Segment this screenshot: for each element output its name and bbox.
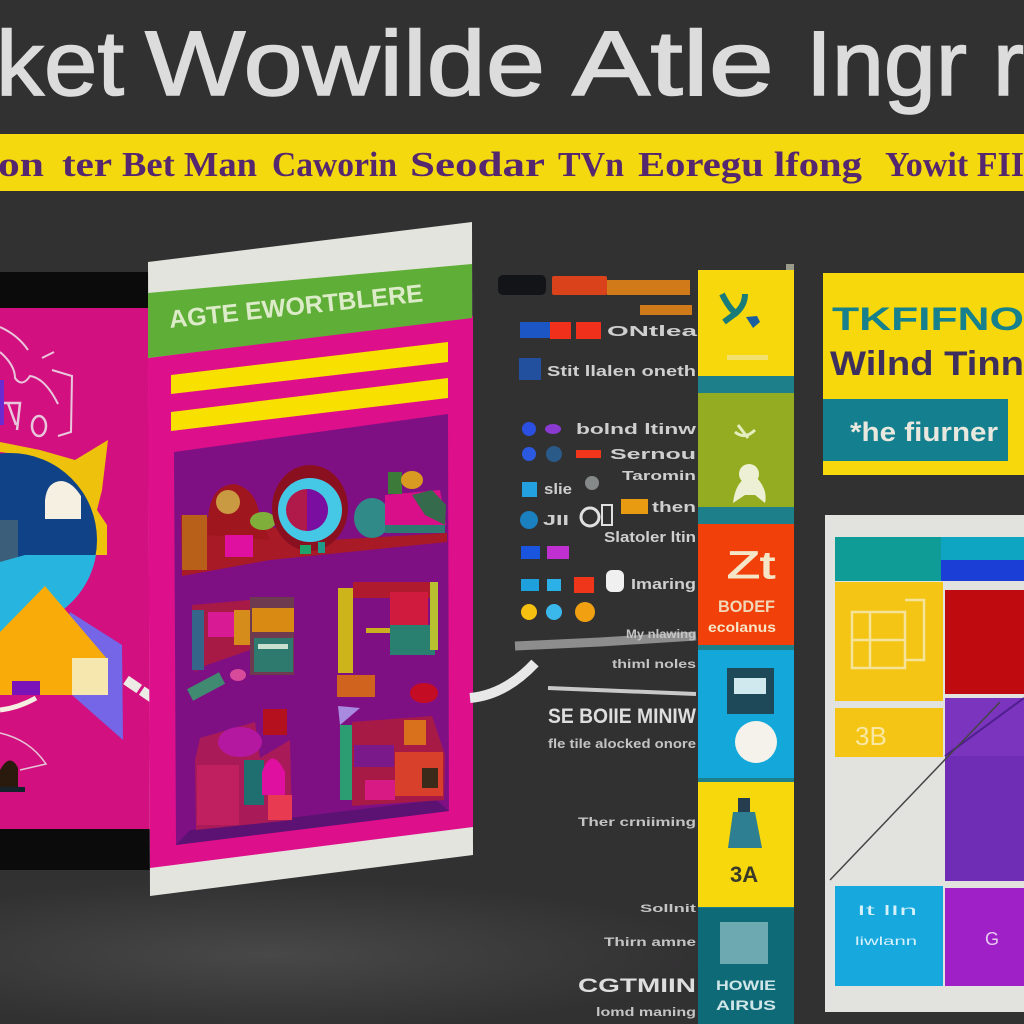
card button: *he fiurner: [850, 417, 999, 447]
tile: orange: ecolanus: [708, 619, 776, 635]
subtitle band: Seodar: [410, 145, 545, 184]
subtitle band: Yowit FII: [885, 145, 1024, 184]
treemap tile: purple: G: [985, 929, 999, 949]
shelf illustration: lower left: [195, 709, 292, 830]
panel: central poster: [148, 222, 473, 896]
title: [0, 13, 1024, 115]
tile: yellow: [698, 270, 794, 376]
treemap tile: violet: [945, 698, 1024, 881]
text block: notes: fle tile alocked onore: [548, 736, 696, 751]
tile: olive: [698, 393, 794, 507]
shelf illustration: [181, 465, 447, 576]
icon: small dome: [0, 760, 18, 790]
text block: notes: Ther crniiming: [578, 815, 696, 829]
text block: notes: thiml noles: [612, 657, 696, 671]
title: Wowilde: [145, 13, 545, 115]
legend: top bar: ONtlea: [607, 323, 698, 340]
treemap tile: blue: liwlann: [855, 934, 917, 948]
shelf illustration: lower right: [338, 706, 445, 806]
trend line: [830, 702, 1000, 880]
legend: dotted rows: Imaring: [631, 576, 696, 593]
legend: dotted rows: Sernou: [610, 446, 696, 463]
text block: notes: SE BOIIE MINIW: [548, 705, 696, 728]
legend: dotted rows: slie: [544, 481, 572, 498]
treemap tile: blue: [835, 886, 943, 986]
tile: teal: HOWIE: [716, 977, 776, 993]
subtitle band: Eoregu lfong: [638, 145, 863, 184]
icon: white badge: [45, 481, 81, 519]
treemap header: [835, 537, 1024, 581]
shelf illustration: middle right: [337, 582, 438, 703]
card button: [823, 399, 1008, 461]
text block: notes: lomd maning: [596, 1005, 696, 1019]
panel header: green: AGTE EWORTBLERE: [168, 279, 424, 334]
yellow bars: [171, 342, 448, 394]
treemap tile: red: [945, 590, 1024, 694]
text block: notes: My nlawing: [626, 627, 696, 641]
legend: dotted rows: [520, 421, 696, 622]
icon: line sketch: [0, 327, 72, 436]
subtitle band: Caworin: [272, 145, 397, 184]
tile: orange: BODEF: [718, 597, 775, 616]
text block: notes: [548, 627, 697, 1019]
arrow: right connector: [470, 636, 696, 698]
tile: blue: [698, 650, 794, 778]
treemap tile: purple: [945, 888, 1024, 986]
title: Ingr r: [806, 13, 1024, 115]
panel: left pink poster: [0, 272, 150, 870]
legend: top bar: [498, 275, 698, 380]
subtitle band: ter: [62, 145, 112, 184]
panel: yellow card: [823, 273, 1024, 475]
arrow: left connector: [126, 680, 219, 751]
tile: orange: [698, 524, 794, 645]
text block: notes: Sollnit: [640, 903, 697, 915]
panel: vertical tile strip: [698, 264, 794, 1024]
tile: yellow bottle: [698, 782, 794, 907]
legend: dotted rows: Taromin: [622, 468, 696, 483]
text block: notes: CGTMIIN: [578, 976, 696, 997]
subtitle band: TVn: [558, 145, 624, 184]
panel: yellow card: TKFIFNO: [832, 301, 1024, 337]
text block: notes: Thirn amne: [604, 935, 696, 949]
panel: purple area: [174, 414, 449, 845]
chart: circle and house: [0, 440, 123, 792]
legend: dotted rows: then: [652, 499, 696, 516]
treemap tile: blue: It lIn: [857, 902, 917, 918]
tile: yellow bottle: 3A: [730, 862, 758, 887]
panel: yellow card: Wilnd Tinn: [830, 345, 1024, 383]
subtitle band: Bet Man: [122, 145, 257, 184]
tile: orange: Zt: [727, 545, 776, 587]
panel: treemap chart: [825, 515, 1024, 1012]
tile: teal: [698, 908, 794, 1024]
subtitle band: [0, 134, 1024, 191]
treemap tile: small yellow: 3B: [855, 721, 887, 751]
legend: dotted rows: JII: [543, 512, 569, 529]
legend: dotted rows: bolnd ltinw: [576, 421, 696, 438]
legend: dotted rows: Slatoler ltin: [604, 529, 696, 546]
treemap tile: yellow plan: [835, 582, 943, 701]
title: Atle: [572, 13, 774, 115]
shelf illustration: middle left: [190, 597, 294, 695]
tile: teal: AIRUS: [716, 997, 776, 1013]
treemap tile: small yellow: [835, 708, 943, 757]
legend list: [498, 275, 698, 622]
panel header: green: [148, 264, 472, 358]
legend: top bar: Stit llalen oneth: [547, 363, 696, 380]
